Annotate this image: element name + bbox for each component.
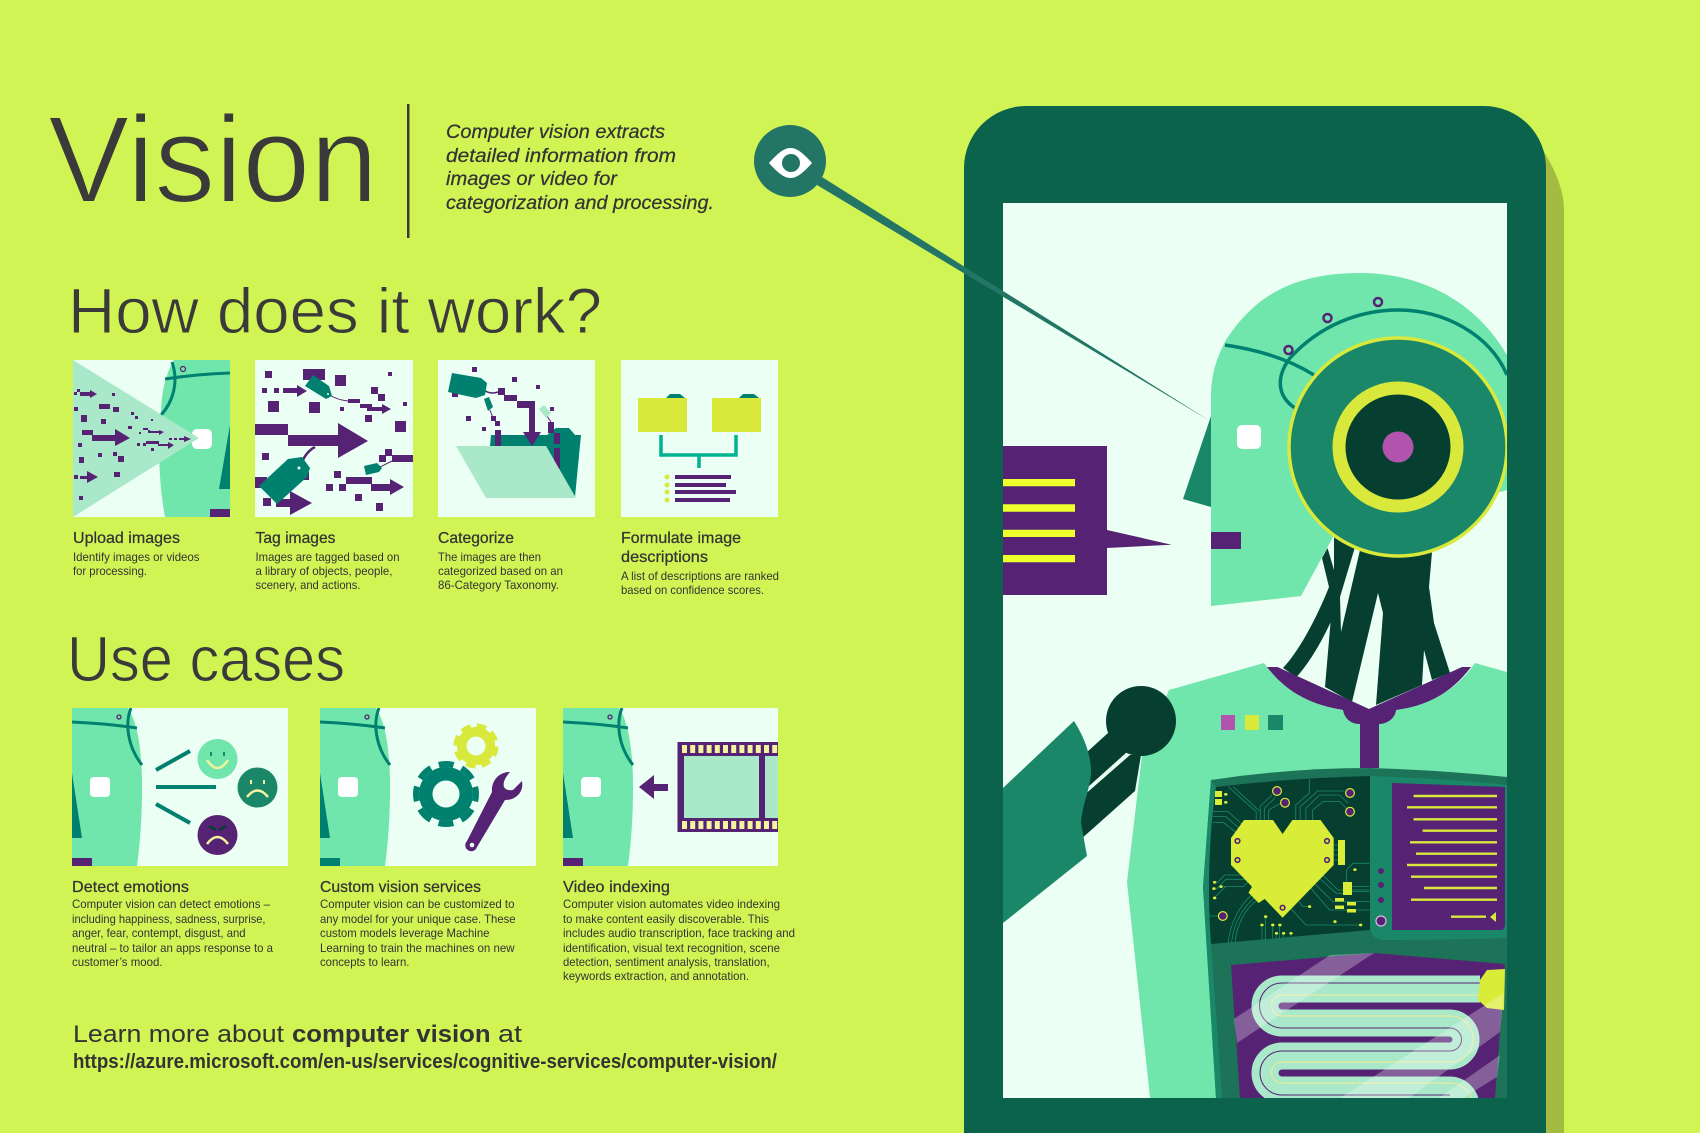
status lights bbox=[1221, 715, 1283, 730]
display text lines bbox=[1407, 796, 1497, 917]
card: categorize bbox=[438, 360, 595, 517]
card labels: how does it work: for processing. bbox=[73, 564, 147, 578]
card labels: use cases: customer’s mood. bbox=[72, 955, 162, 969]
card labels: how does it work: Formulate image bbox=[621, 530, 741, 547]
card labels: how does it work: Upload images bbox=[73, 530, 180, 547]
intro text: detailed information from bbox=[446, 145, 676, 167]
head nodes bbox=[1284, 298, 1382, 354]
card labels: use cases: includes audio transcription, face tracking and bbox=[563, 926, 795, 940]
mouth bbox=[1211, 532, 1241, 549]
intro text bbox=[446, 121, 714, 214]
coil cap bbox=[1478, 969, 1505, 1010]
robot head bbox=[1211, 273, 1507, 606]
card labels: use cases: Detect emotions bbox=[72, 879, 189, 896]
speech bubble bbox=[1003, 446, 1172, 595]
card: formulate image descriptions bbox=[621, 360, 778, 517]
card labels: how does it work: a library of objects, people, bbox=[256, 564, 392, 578]
coil bbox=[1265, 989, 1480, 1123]
card labels: how does it work: Images are tagged based on bbox=[256, 550, 400, 564]
card labels: use cases: Computer vision automates video indexing bbox=[563, 897, 780, 911]
card labels: how does it work bbox=[73, 530, 779, 597]
glare bbox=[1234, 953, 1504, 1098]
robot body bbox=[1127, 663, 1507, 1098]
nose bbox=[1183, 416, 1211, 507]
card labels: how does it work: The images are then bbox=[438, 550, 541, 564]
circuit traces bbox=[1210, 779, 1369, 943]
learn more callout: computer vision bbox=[292, 1021, 491, 1048]
learn more callout: at bbox=[498, 1021, 522, 1048]
display buttons bbox=[1376, 868, 1386, 926]
card labels: how does it work: scenery, and actions. bbox=[256, 578, 360, 592]
arm bbox=[1003, 686, 1176, 923]
card labels: how does it work: Categorize bbox=[438, 530, 514, 547]
heart chip bbox=[1231, 820, 1334, 918]
card labels: use cases: Computer vision can be customized to bbox=[320, 897, 515, 911]
title: Vision bbox=[48, 92, 378, 229]
card labels: how does it work: categorized based on an bbox=[438, 564, 563, 578]
card labels: use cases: custom models leverage Machine bbox=[320, 926, 490, 940]
card labels: use cases: concepts to learn. bbox=[320, 955, 409, 969]
card labels: use cases: Computer vision can detect emotions – bbox=[72, 897, 270, 911]
heading: how does it work: How does it work? bbox=[68, 275, 602, 347]
card labels: how does it work: based on confidence scores. bbox=[621, 583, 764, 597]
learn more callout: Learn more about bbox=[73, 1021, 284, 1048]
card labels: how does it work: A list of descriptions are ranked bbox=[621, 569, 779, 583]
learn more callout bbox=[73, 1021, 777, 1073]
card labels: how does it work: Tag images bbox=[256, 530, 336, 547]
card labels: use cases: neutral – to tailor an apps response to a bbox=[72, 941, 273, 955]
card labels: use cases: detection, sentiment analysis, translation, bbox=[563, 955, 770, 969]
card labels: use cases: any model for your unique case. These bbox=[320, 912, 516, 926]
chest frame bbox=[1203, 768, 1507, 1098]
intro text: images or video for bbox=[446, 168, 619, 190]
ear disc bbox=[1289, 338, 1507, 556]
head circuit lines bbox=[1225, 310, 1507, 408]
phone shadow bbox=[1540, 150, 1564, 1133]
card labels: use cases bbox=[72, 879, 795, 983]
collar bbox=[1267, 667, 1471, 768]
card: detect emotions bbox=[72, 708, 288, 866]
card labels: use cases: to make content easily discoverable. This bbox=[563, 912, 769, 926]
card labels: use cases: anger, fear, contempt, disgust, and bbox=[72, 926, 246, 940]
card labels: use cases: including happiness, sadness, surprise, bbox=[72, 912, 266, 926]
robot illustration bbox=[1003, 273, 1507, 1123]
intro text: categorization and processing. bbox=[446, 192, 714, 214]
card labels: use cases: Custom vision services bbox=[320, 879, 481, 896]
card labels: use cases: keywords extraction, and annotation. bbox=[563, 969, 749, 983]
card labels: use cases: Learning to train the machines on new bbox=[320, 941, 515, 955]
phone screen bbox=[1003, 203, 1507, 1098]
card labels: use cases: Video indexing bbox=[563, 879, 670, 896]
card labels: how does it work: descriptions bbox=[621, 549, 708, 566]
card: video indexing bbox=[563, 708, 778, 866]
card labels: how does it work: 86-Category Taxonomy. bbox=[438, 578, 559, 592]
display panel bbox=[1370, 776, 1507, 940]
board components bbox=[1215, 791, 1356, 912]
card: tag images bbox=[255, 360, 413, 517]
title divider bbox=[407, 104, 410, 238]
learn more callout: https://azure.microsoft.com/en-us/services/cognitive-services/computer-vision/ bbox=[73, 1051, 777, 1073]
phone body bbox=[964, 106, 1546, 1133]
card labels: use cases: identification, visual text recognition, scene bbox=[563, 941, 780, 955]
card labels: how does it work: Identify images or videos bbox=[73, 550, 200, 564]
eye icon bbox=[754, 125, 826, 197]
card: upload images bbox=[73, 360, 230, 517]
circuit board bbox=[1209, 776, 1370, 944]
chip pads bbox=[1235, 839, 1329, 910]
intro text: Computer vision extracts bbox=[446, 121, 665, 143]
connector line bbox=[817, 177, 1210, 421]
neck cables bbox=[1283, 537, 1450, 705]
board nodes bbox=[1218, 787, 1354, 920]
battery panel bbox=[1231, 953, 1505, 1098]
card: custom vision services bbox=[320, 708, 536, 866]
robot eye bbox=[1237, 425, 1261, 449]
heading: use cases: Use cases bbox=[67, 623, 345, 695]
